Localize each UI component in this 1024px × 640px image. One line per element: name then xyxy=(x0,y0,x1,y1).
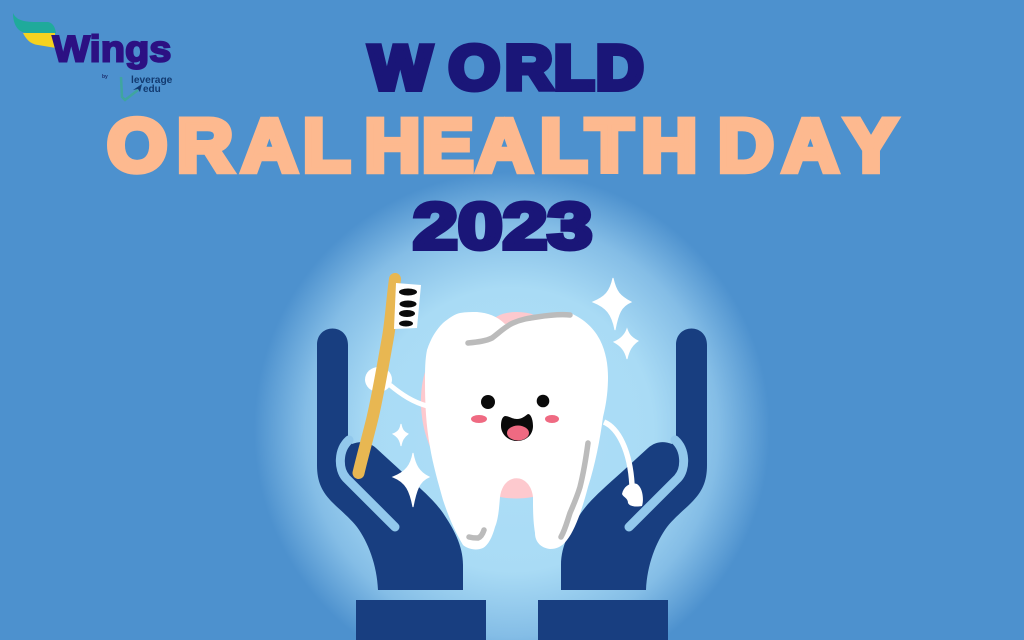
bristles xyxy=(399,288,417,326)
right wrist cuff xyxy=(538,600,668,640)
logo leverage: leverage xyxy=(131,75,173,86)
mouth xyxy=(501,414,533,441)
bristle 3 xyxy=(399,310,415,317)
tooth highlight top xyxy=(468,315,570,343)
right arm xyxy=(604,422,632,485)
gum notch xyxy=(500,478,533,498)
title: ORAL HEALTH DAY: ORAL HEALTH DAY xyxy=(107,104,897,186)
sparkle: small right xyxy=(614,329,638,359)
tooth character xyxy=(365,312,643,549)
title: 2023: 2023 xyxy=(413,190,592,263)
tooth highlight bottom xyxy=(469,530,484,538)
toothbrush xyxy=(358,279,421,473)
logo check xyxy=(121,77,138,100)
right hand of tooth xyxy=(622,483,643,507)
right hand highlight xyxy=(629,440,684,527)
brush head xyxy=(394,283,421,329)
left hand of tooth xyxy=(365,367,392,392)
bristle 4 xyxy=(399,320,413,326)
left hand highlight xyxy=(340,440,395,527)
tongue xyxy=(507,426,529,440)
logo rocket xyxy=(133,84,142,92)
sparkle: large right xyxy=(593,278,631,330)
tooth body xyxy=(425,312,608,549)
radial glow xyxy=(254,172,770,640)
logo wordmark: Wings xyxy=(52,29,171,70)
brush handle xyxy=(358,279,395,473)
left hand xyxy=(317,328,463,590)
right cheek xyxy=(545,415,559,423)
bristle 1 xyxy=(399,288,417,296)
sparkle: large left xyxy=(393,453,429,507)
logo: Wings by leverage edu xyxy=(13,13,173,100)
sparkle: small left xyxy=(393,424,408,446)
left wrist cuff xyxy=(356,600,486,640)
logo ribbon teal xyxy=(13,13,56,33)
logo edu: edu xyxy=(143,84,161,95)
title: WORLD: WORLD xyxy=(369,33,644,103)
left cheek xyxy=(471,415,487,423)
left arm xyxy=(390,385,427,406)
logo ribbon yellow xyxy=(23,33,56,48)
logo by: by xyxy=(102,74,108,80)
right hand xyxy=(561,328,707,590)
left eye xyxy=(481,395,495,409)
gum left xyxy=(421,372,445,449)
right eye xyxy=(537,395,549,407)
tooth highlight right xyxy=(561,443,588,537)
bristle 2 xyxy=(400,300,416,308)
gum top xyxy=(493,312,541,332)
